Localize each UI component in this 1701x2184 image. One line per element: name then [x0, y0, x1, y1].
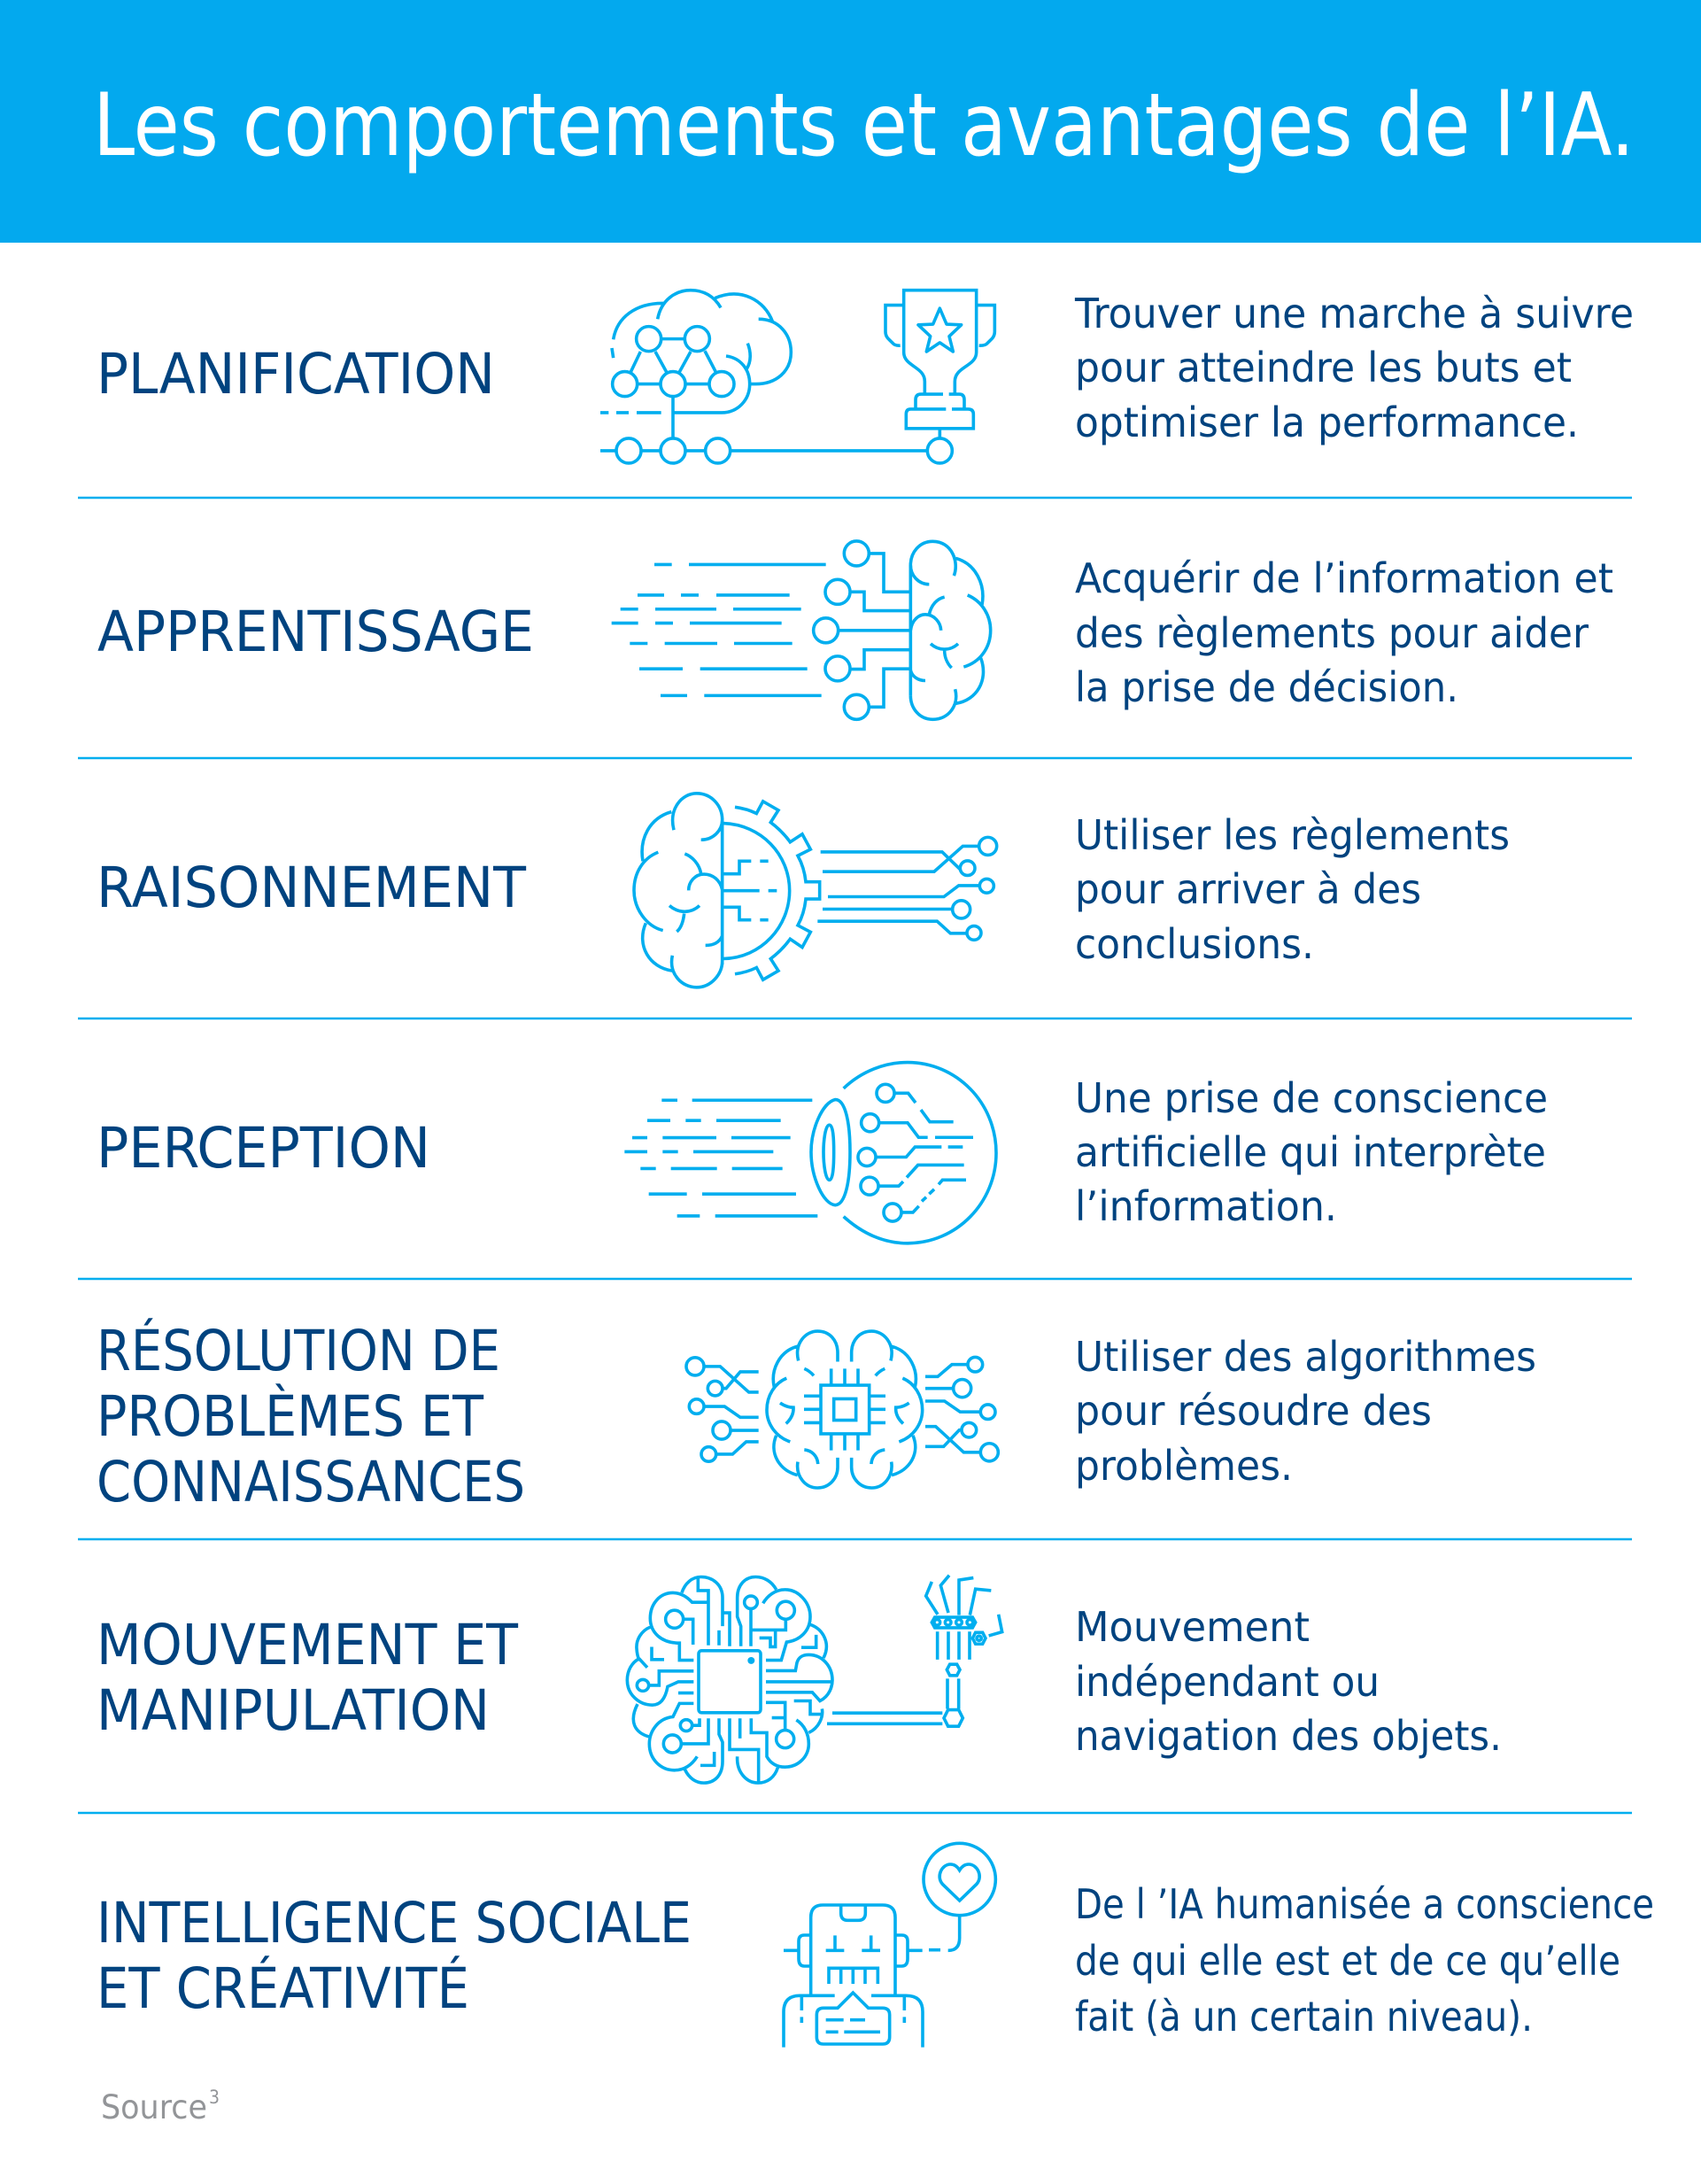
description: intelligence sociale et créativité: de qui elle est et de ce qu’elle [1075, 1937, 1620, 1985]
panel: mouvement et manipulation [97, 1576, 1502, 1783]
description: perception: Une prise de conscience [1075, 1074, 1548, 1122]
description: perception: l’information. [1075, 1182, 1337, 1230]
panel: intelligence sociale et créativité [97, 1843, 1654, 2048]
heading: intelligence sociale et créativité: INTELLIGENCE SOCIALE [97, 1891, 692, 1956]
heading: intelligence sociale et créativité: ET CRÉATIVITÉ [97, 1956, 469, 2021]
heading: raisonnement: RAISONNEMENT [97, 856, 526, 920]
description: mouvement et manipulation [1075, 1603, 1502, 1760]
description: intelligence sociale et créativité [1075, 1880, 1654, 2041]
heading: mouvement et manipulation: MOUVEMENT ET [97, 1613, 518, 1677]
panel: raisonnement [97, 794, 1510, 987]
heading: résolution de problèmes et connaissances: CONNAISSANCES [97, 1450, 525, 1514]
description: résolution de problèmes: pour résoudre des [1075, 1387, 1432, 1435]
panel: planification [97, 290, 1634, 463]
panel: apprentissage [97, 541, 1613, 719]
description: mouvement et manipulation: Mouvement [1075, 1603, 1310, 1651]
description: apprentissage: des règlements pour aider [1075, 609, 1589, 657]
icon: data stream into eye [624, 1063, 996, 1243]
description: raisonnement [1075, 811, 1510, 968]
source note: Source [101, 2088, 207, 2126]
header banner [0, 0, 1701, 243]
description: planification: Trouver une marche à suivre [1074, 290, 1634, 337]
heading: perception: PERCEPTION [97, 1116, 430, 1181]
description: raisonnement: Utiliser les règlements [1075, 811, 1510, 859]
description: mouvement et manipulation: navigation des objets. [1075, 1712, 1502, 1760]
heading: résolution de problèmes et connaissances [97, 1319, 525, 1514]
description: mouvement et manipulation: indépendant ou [1075, 1658, 1380, 1706]
description: raisonnement: pour arriver à des [1075, 865, 1421, 913]
description: planification: optimiser la performance. [1075, 399, 1579, 446]
description: perception [1075, 1074, 1548, 1230]
description: raisonnement: conclusions. [1075, 920, 1314, 968]
description: apprentissage: la prise de décision. [1075, 663, 1458, 711]
description: résolution de problèmes: problèmes. [1075, 1442, 1293, 1490]
source note: 3 [209, 2087, 220, 2108]
heading: planification: PLANIFICATION [97, 342, 495, 407]
heading: mouvement et manipulation [97, 1613, 518, 1743]
icon: cloud network and trophy [600, 290, 994, 463]
panel: résolution de problèmes [97, 1319, 1536, 1514]
heading: mouvement et manipulation: MANIPULATION [97, 1678, 490, 1743]
description: apprentissage: Acquérir de l’information et [1075, 554, 1613, 602]
description: résolution de problèmes: Utiliser des algorithmes [1075, 1333, 1536, 1381]
icon: circuit brain and robotic hand [627, 1576, 1002, 1783]
description: apprentissage [1075, 554, 1613, 711]
icon: robot with heart bubble [784, 1843, 995, 2048]
heading: intelligence sociale et créativité [97, 1891, 692, 2021]
icon: data stream into brain [612, 541, 991, 719]
description: intelligence sociale et créativité: fait (à un certain niveau). [1075, 1993, 1533, 2041]
heading: résolution de problèmes et connaissances: PROBLÈMES ET [97, 1384, 483, 1449]
description: planification: pour atteindre les buts et [1075, 344, 1572, 391]
icon: brain and gear [634, 794, 997, 987]
heading: résolution de problèmes et connaissances: RÉSOLUTION DE [97, 1319, 500, 1383]
description: planification [1074, 290, 1634, 446]
panel: perception [97, 1063, 1548, 1243]
heading: apprentissage: APPRENTISSAGE [97, 600, 534, 664]
icon: brain with chip [686, 1331, 998, 1488]
description: perception: artificielle qui interprète [1075, 1128, 1546, 1176]
description: résolution de problèmes [1075, 1333, 1536, 1490]
